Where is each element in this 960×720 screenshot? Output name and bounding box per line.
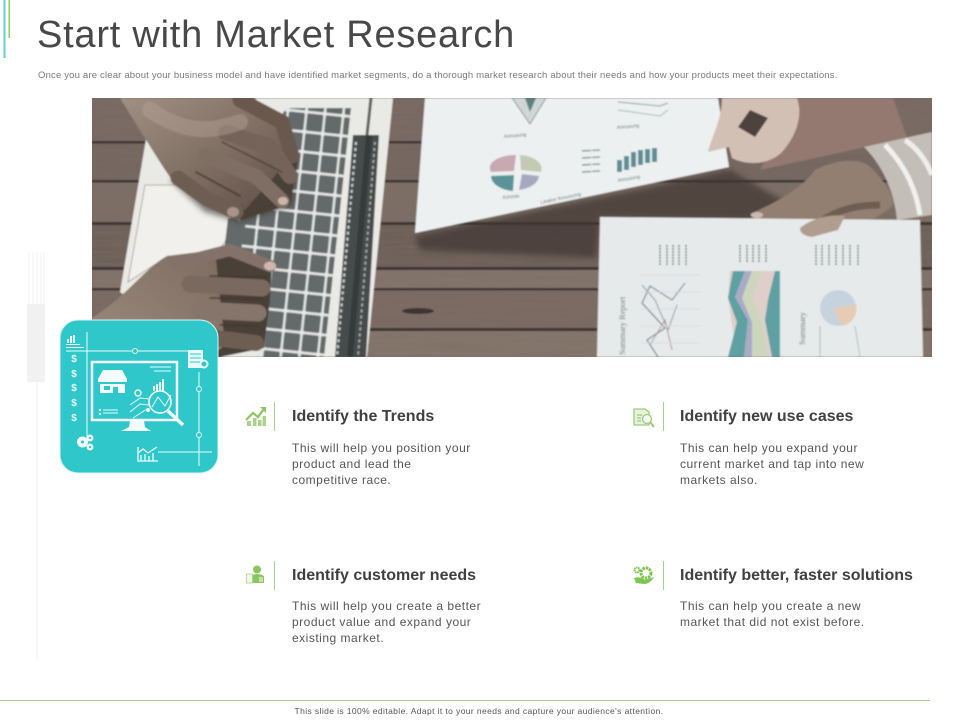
circuit lines — [66, 332, 212, 466]
dollar signs — [71, 354, 77, 424]
report paper bottom: Summary Report — [617, 296, 627, 355]
top right hand — [708, 98, 799, 163]
footer note: This slide is 100% editable. Adapt it to your needs and capture your audience's attention. — [295, 706, 663, 716]
shadows — [415, 170, 800, 258]
item: identify customer needs — [292, 567, 481, 645]
icon: use cases — [634, 409, 654, 427]
dollar signs: $ — [71, 413, 77, 424]
dollar signs: $ — [71, 383, 77, 394]
paper charts: Linaksr Annusumg — [540, 191, 582, 206]
lower right hand — [750, 160, 893, 220]
subtitle: Once you are clear about your business model and have identified market segments, do a thorough market research about their needs and how your products meet their expectations. — [38, 70, 838, 81]
icon: solutions — [634, 568, 654, 584]
icon: trends — [246, 407, 266, 426]
icon: small bars — [66, 335, 84, 348]
heading: Identify new use cases — [680, 408, 853, 425]
item separators — [274, 402, 664, 590]
dollar signs: $ — [71, 398, 77, 409]
laptop — [120, 98, 393, 357]
accent bars — [4, 0, 10, 58]
description — [680, 441, 864, 487]
description: markets also. — [680, 473, 758, 487]
icon: document and gear — [188, 350, 208, 368]
dollar signs: $ — [71, 369, 77, 380]
item: identify new use cases — [680, 408, 864, 487]
paper area chart — [728, 271, 780, 357]
description: This will help you create a better — [292, 599, 481, 613]
description: market that did not exist before. — [680, 615, 865, 629]
description — [292, 441, 471, 487]
report paper bottom — [597, 217, 923, 357]
title: Start with Market Research — [37, 14, 515, 56]
paper line chart — [642, 283, 685, 357]
heading: Identify customer needs — [292, 567, 476, 584]
paper charts: Annusung — [504, 132, 527, 140]
item: identify better, faster solutions — [680, 567, 913, 629]
wood planks — [92, 98, 932, 357]
description: current market and tap into new — [680, 457, 864, 471]
description: This will help you position your — [292, 441, 471, 455]
description: This can help you expand your — [680, 441, 858, 455]
paper charts: Kimmle — [503, 194, 520, 201]
description: existing market. — [292, 631, 384, 645]
heading: Identify better, faster solutions — [680, 567, 913, 584]
dollar signs: $ — [71, 354, 77, 365]
lower hand — [92, 250, 276, 357]
description — [680, 599, 865, 629]
icon: chart — [138, 447, 158, 461]
side decoration — [27, 252, 45, 660]
description: product and lead the — [292, 457, 411, 471]
report paper bottom: Summary — [797, 311, 807, 345]
report paper top — [415, 98, 729, 233]
shadow under upper hand — [168, 170, 298, 224]
upper hand — [120, 98, 298, 220]
description: This can help you create a new — [680, 599, 861, 613]
sleeve — [864, 132, 932, 220]
photo: market research on a desk — [92, 98, 932, 357]
paper charts: Annusung — [617, 123, 640, 131]
icon: monitor with storefront — [92, 362, 183, 431]
description: competitive race. — [292, 473, 391, 487]
folder — [760, 98, 907, 170]
teal icon panel — [60, 320, 218, 473]
thumb over paper — [800, 216, 845, 237]
description: product value and expand your — [292, 615, 471, 629]
item: identify the trends — [292, 408, 471, 487]
footer rule — [0, 700, 930, 702]
paper charts: Annusung — [617, 174, 641, 184]
heading: Identify the Trends — [292, 408, 434, 425]
paper pie chart — [820, 290, 856, 326]
paper charts — [490, 98, 668, 206]
icon: customer needs — [246, 566, 264, 583]
description — [292, 599, 481, 645]
icon: gears — [79, 436, 92, 449]
